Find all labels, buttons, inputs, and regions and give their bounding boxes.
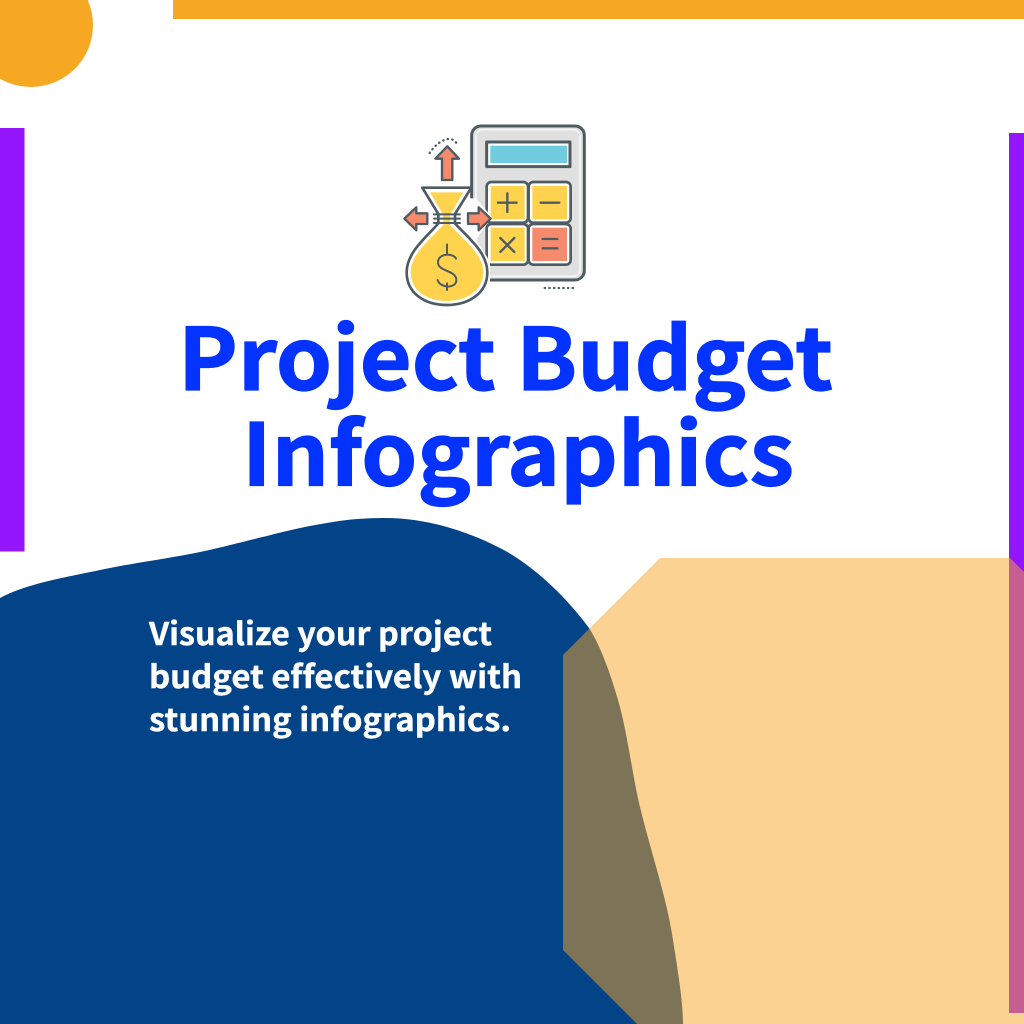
decoration: purple bar right [1009, 133, 1024, 1013]
icon: calculator body [472, 126, 584, 280]
icon: money bag [407, 188, 487, 305]
decoration: orange bar top [173, 0, 1024, 19]
icon: white halo behind bag [403, 198, 492, 302]
icon: dotted accents [430, 139, 576, 288]
subtitle line 2: budget effectively with [149, 652, 522, 697]
icon: money bag and calculator [403, 126, 584, 305]
title [178, 290, 833, 510]
icon: arrow up [435, 146, 459, 180]
subtitle line 3: stunning infographics. [149, 695, 511, 740]
title line 2: Infographics [242, 386, 794, 510]
subtitle line 1: Visualize your project [148, 609, 492, 654]
decoration: navy blob [0, 518, 683, 1024]
icon: arrow left [404, 207, 427, 230]
subtitle text [148, 609, 522, 740]
decoration: orange circle top left [0, 0, 93, 87]
decoration: translucent peach polygon [563, 558, 1024, 1024]
icon: calculator keys [487, 182, 571, 265]
decoration: purple bar left [0, 128, 24, 552]
title line 1: Project Budget [178, 290, 833, 415]
icon: arrow right [468, 207, 491, 230]
